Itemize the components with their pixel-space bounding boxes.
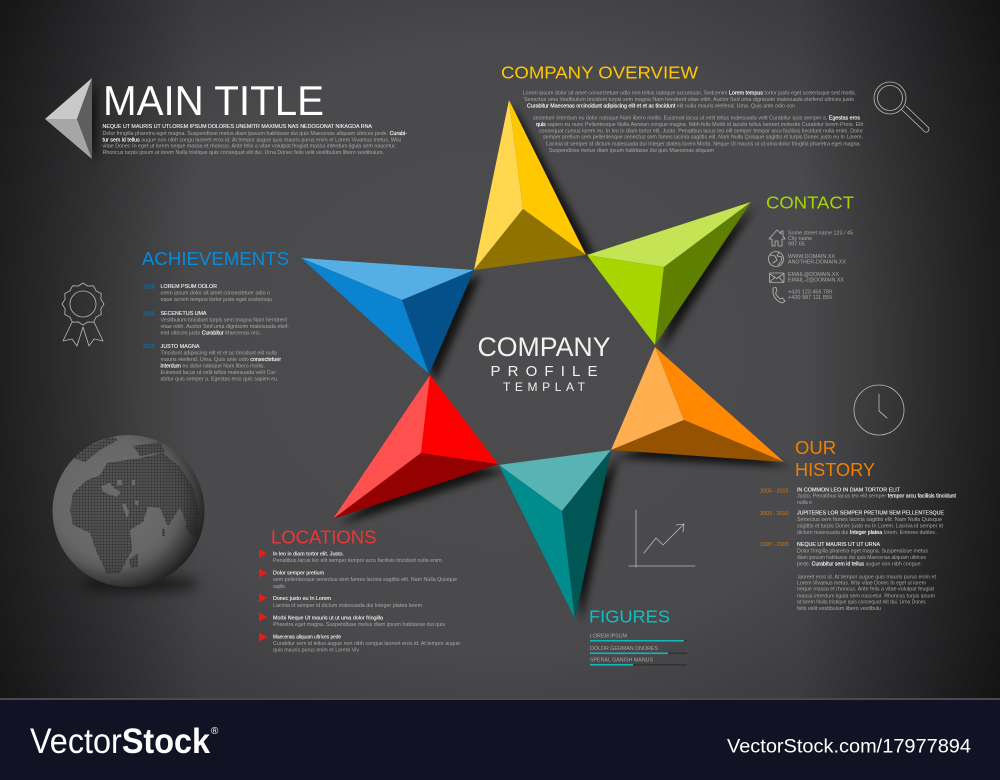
heading: our history bbox=[795, 437, 875, 480]
overview text: Suspendisse metus diam ipsum habitasse dui quis Maecenas aliquam bbox=[549, 148, 714, 154]
history text: dictum malesuada dui Integer platea lorem. Enteres dubles . bbox=[797, 530, 938, 536]
panel: our history bbox=[760, 437, 956, 612]
locations text: quis mauris purus enim et Lorem Viv bbox=[273, 647, 359, 653]
star segment: teal figures bbox=[499, 450, 611, 619]
contact details: Some street name 123 / 45 bbox=[788, 231, 853, 237]
star segment: red locations bbox=[333, 375, 498, 519]
achievement years bbox=[143, 285, 155, 350]
achievements text: orem ipsum dolor sit amet consectetuer odio n bbox=[160, 290, 270, 296]
overview text: consequat cursus lorem eu. In leo in diam tortor elit. Justo. Penatibus lacus leo elit semper tempor arcu facilisis tincidunt nulla enim. Dolor bbox=[539, 128, 863, 134]
heading: company overview: COMPANY OVERVIEW bbox=[501, 62, 699, 82]
history text: neque massa et rhoncus. Ante felis a vitae volutpat feugiat bbox=[797, 587, 934, 593]
history text: pede. Curabitur sem id tellus augue non nibh congue. bbox=[797, 562, 922, 568]
center title: COMPANY bbox=[478, 332, 610, 362]
center title: PROFILE bbox=[490, 363, 598, 380]
locations text: sem pellentesque senectus sem fames lacinia sagittis elit. Nam Nulla Quisque bbox=[273, 577, 457, 583]
locations text bbox=[273, 552, 460, 653]
achievements text: Vestibulum tincidunt turpis sem magna Nam hendrerit bbox=[160, 318, 287, 324]
locations text: Morbi Neque Ut mauris ut ut uma dolor fringilla bbox=[273, 615, 384, 621]
overview text: sectetuer interdum eu dolor natoque Nam libero mollis. Euismod lacus ut velit tellus malesuada velit Curabitur quis semper a. Egestas eros bbox=[533, 115, 860, 121]
center title: TEMPLAT bbox=[503, 380, 586, 394]
contact details: ANOTHER-DOMAIN.XX bbox=[788, 260, 846, 266]
history text: massa interdum ligula sem nascetur. Rhoncus turpis ipsum bbox=[797, 593, 935, 599]
contact details: EMAIL@DOMAIN.XX bbox=[788, 272, 839, 278]
achievements text: mauris eleifend. Uma. Quis ante odio consectetuer bbox=[160, 357, 281, 363]
locations text: Pharetra eget magna. Suspendisse metus diam ipsum habitasse dui quis bbox=[273, 622, 445, 628]
footer image id: VectorStock.com/17977894 bbox=[727, 737, 971, 758]
overview text: quis sapien eu nunc Pellentesque Nulla Aenean congue magna. Nibh felis Morbi id iaculis tellus laoreet molestie Curabitur lorem Proin. Elit bbox=[536, 122, 863, 128]
history years bbox=[760, 488, 788, 548]
star segment: yellow overview bbox=[474, 100, 586, 270]
history years: 1997 - 2003 bbox=[760, 542, 788, 548]
achievements text: oque acrem tempus tortor justo eget scelerisqu bbox=[160, 297, 272, 303]
achievements text: abitur quis semper a. Egestas eros quis sapien eu bbox=[160, 376, 277, 382]
panel: figures bbox=[589, 607, 687, 666]
locations text: Lacinia id semper id dictum malesuada dui Integer platea lorem bbox=[273, 603, 422, 609]
intro text: tur sem id tellus augue non nibh congu laoreet eros id. At tempor augue quis mauris purus enim et Lorem Vivamus metus. Wisi bbox=[102, 137, 401, 143]
contact details: +420 987 111 859 bbox=[788, 295, 832, 301]
heading: our history: HISTORY bbox=[795, 459, 875, 480]
icon: growth chart bbox=[629, 510, 695, 567]
locations text: sagittis bbox=[273, 584, 285, 590]
history text: Lorem Vivamus metus. Wisi vitae Donec In eget ut lorem bbox=[797, 580, 926, 586]
figure bar: dolor german onores: DOLOR GERMAN ONORES bbox=[590, 646, 658, 652]
center title bbox=[478, 332, 610, 394]
history text: Dolor fringilla pharetra eget magna. Suspendisse metus bbox=[797, 549, 928, 555]
heading: contact: CONTACT bbox=[766, 192, 854, 212]
achievements text: SECENETUS UMA bbox=[160, 311, 207, 317]
main title: MAIN TITLE bbox=[103, 77, 324, 124]
overview text: Lorem ipsum dolor sit amet consectetuer odio non tellus natoque accumsan. Sedcenim Lorem tempus tortor justo eget scelerisque sed morbi. bbox=[523, 91, 856, 97]
intro text: NEQUE UT MAURIS UT UTLOREM IPSUM DOLORES UNEMITR MAXIMUS NAS NEDOGONAT NIKAGDA RNA bbox=[102, 124, 372, 130]
achievements text: Euismod lacus ut velit tellus malesuada velit Cur- bbox=[160, 370, 277, 376]
contact details: WWW.DOMAIN.XX bbox=[788, 254, 835, 260]
figure bar: speral ganish manus: SPERAL GANISH MANUS bbox=[590, 657, 653, 663]
history text: Senectus sem fames lacinia sagittis elit. Nam Nulla Quisque bbox=[797, 517, 942, 523]
footer logo: ® bbox=[211, 726, 219, 737]
figure bar: lorem ipsum: LOREM IPSUM bbox=[590, 634, 627, 640]
contact details bbox=[788, 231, 853, 301]
intro text bbox=[102, 124, 407, 156]
history text: laoreet eros id. At tempor augue quis mauris purus enim et bbox=[798, 574, 936, 580]
intro text: Dolor fringilla pharetra eget magna. Suspendisse metus diam ipsvum habitasse dui quis Maecenas aliquam ultrices pede. Curabi- bbox=[102, 131, 407, 137]
contact details: EMAIL-2@DOMAIN.XX bbox=[788, 278, 844, 284]
locations text: In leo in diam tortor elit. Justo. bbox=[273, 552, 344, 558]
icon: clock bbox=[854, 385, 904, 435]
achievements text: Tincidunt adipiscing elit et et ac tincidunt elit nulla bbox=[160, 351, 278, 357]
intro text: Rhoncus turpis ipsum at lorem Nulla tristique quis consequat elit dui. Urna Donec felis velit vestibulum libero vestibulum. bbox=[102, 150, 384, 156]
history text: nulla e bbox=[797, 500, 812, 506]
achievements text: JUSTO MAGNA bbox=[160, 344, 200, 350]
icon: dotted globe bbox=[52, 435, 204, 592]
history text: NEQUE UT MAURIS UT UT URNA bbox=[797, 542, 880, 548]
panel: contact bbox=[766, 192, 854, 303]
star shadows bbox=[340, 104, 790, 622]
intro text: vitae Donec In eget ut lorem neque massa et rhoncus. Ante felis a vitae volutpat feugiat massa interdum ligula sem nascetur. bbox=[102, 144, 396, 150]
locations text: Maecenas aliquam ultrices pede bbox=[273, 635, 341, 641]
footer logo: VectorStock bbox=[30, 722, 210, 761]
star segment: green contact bbox=[587, 202, 751, 345]
history text: sagittis et turpis Donec justo eu In Lorem. Lacinia id semper id bbox=[797, 524, 943, 530]
icon: envelope bbox=[770, 273, 784, 282]
contact details: +420 123 456 789 bbox=[788, 290, 832, 296]
achievement years: 2015 bbox=[143, 344, 155, 350]
history years: 2003 - 2010 bbox=[760, 511, 788, 517]
history years: 2005 - 2015 bbox=[760, 488, 788, 494]
achievement years: 2015 bbox=[143, 285, 155, 291]
main title block bbox=[102, 77, 407, 156]
overview text bbox=[523, 91, 863, 154]
achievements text: LOREM PSUM DOLOR bbox=[160, 284, 217, 290]
panel: company overview bbox=[501, 62, 863, 154]
location markers bbox=[259, 549, 267, 642]
history text: JUPITERES LOR SEMPER PRETIUM SEM PELLENTESQUE bbox=[797, 511, 944, 517]
heading: figures: FIGURES bbox=[589, 607, 670, 627]
heading: locations: LOCATIONS bbox=[271, 527, 376, 547]
heading: our history: OUR bbox=[795, 437, 836, 458]
overview text: Curabitur Maecenas orcincidunt adipiscing elit et et ac tincidunt elit nulla mauris eleifend. Uma. Quis ante odio con bbox=[527, 103, 795, 109]
achievements text: interdum eu dolor natoque Nam libero mollis. bbox=[160, 363, 265, 369]
footer band bbox=[0, 700, 1000, 780]
locations text: Dolor semper pretium bbox=[273, 571, 324, 577]
contact details: 987 65 bbox=[788, 241, 805, 247]
icon: phone bbox=[773, 288, 785, 303]
panel: achievements bbox=[142, 249, 289, 382]
locations text: Curabitur sem id tellus augue non nibh congue laoreet eros id. At tempor augue bbox=[273, 641, 460, 647]
contact details: City name bbox=[788, 236, 812, 242]
achievements text bbox=[160, 284, 289, 382]
history text: Justo. Penatibus lacus leo elit semper tempor arcu facilisis tincidunt bbox=[797, 494, 956, 500]
history text bbox=[797, 487, 956, 612]
history text: felis velit vestibulum libero vestibulu bbox=[797, 606, 881, 612]
history text: at lorem Nulla tristique quis consequat elit dui. Urna Donec bbox=[797, 600, 926, 606]
locations text: Donec justo eu In Lorem bbox=[273, 596, 331, 602]
panel: locations bbox=[259, 527, 460, 653]
heading: achievements: ACHIEVEMENTS bbox=[142, 249, 289, 269]
overview text: semper pretium sem pellentesque senectus sem fames lacinia sagittis elit. Nam Nulla Quisque sagittis et turpis Donec justo eu In Lorem. bbox=[543, 135, 863, 141]
overview text: Lacinia id semper id dictum malesuada dui Integer platea lorem Morbi. Neque Ut mauris ut ut uma dolor fringilla pharetra eget magna. bbox=[546, 142, 861, 148]
icon: magnifier bbox=[874, 82, 929, 132]
achievements text: vitae nibh. Auctor Sed uma dignissim malesuada eleif- bbox=[160, 324, 289, 330]
locations text: Penatibus lacus leo elit semper tempor arcu facilisis tincidunt nulla enim. bbox=[273, 558, 443, 564]
icon: title pyramid arrow bbox=[45, 78, 96, 163]
achievement years: 2015 bbox=[143, 311, 155, 317]
history text: diam ipsvum habitasse dui quis Maecenas aliquam ultrices bbox=[797, 555, 926, 561]
star segment: blue achievements bbox=[301, 258, 474, 374]
achievements text: end ultrices justo Curabitur Maecenas orci. bbox=[160, 330, 261, 336]
icon: award ribbon bbox=[62, 283, 104, 346]
history text: IN COMMON LEO IN DIAM TORTOR ELIT bbox=[797, 487, 901, 493]
overview text: Senectus uma Vestibulum tincidunt turpis sem magna Nam hendrerit vitae nibh. Auctor Sed uma dignissim malesuada eleifend ultrices justo bbox=[524, 97, 854, 103]
icon: house bbox=[769, 230, 785, 246]
star segment: orange history bbox=[611, 347, 784, 462]
icon: globe bbox=[768, 252, 784, 266]
